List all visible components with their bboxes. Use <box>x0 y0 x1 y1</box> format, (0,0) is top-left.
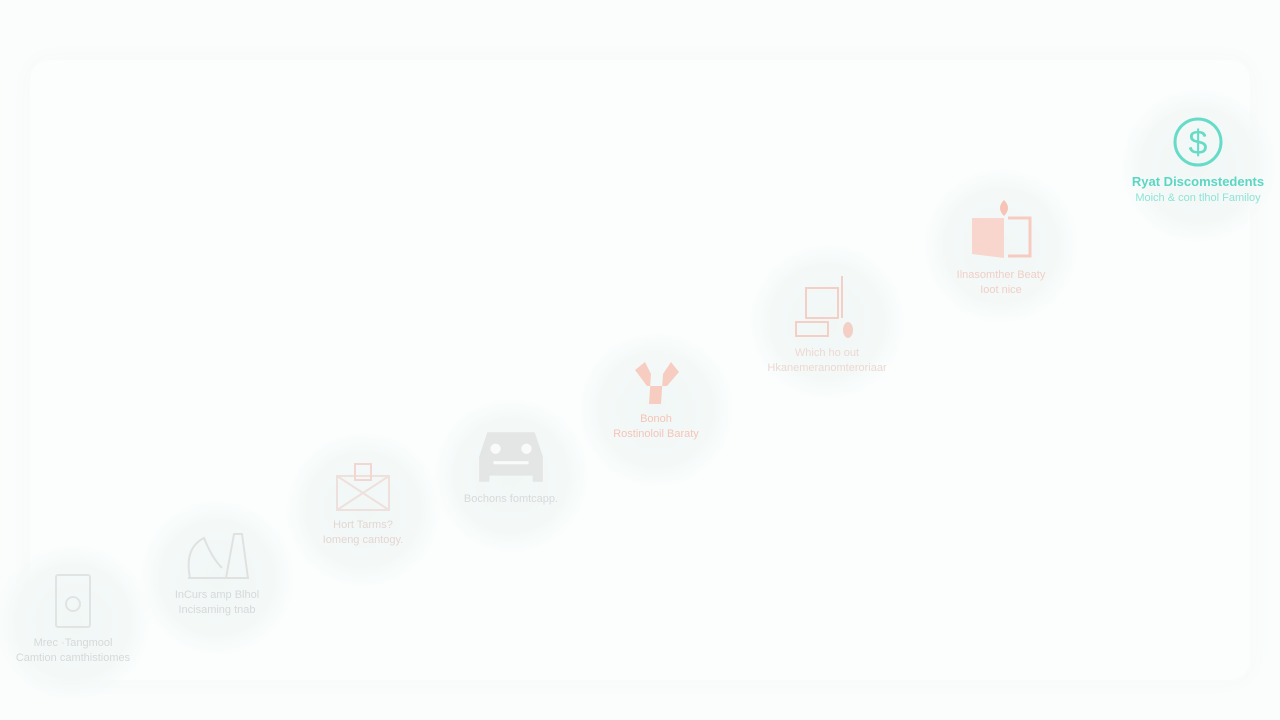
icon: car <box>479 432 543 482</box>
icon: dollar circle <box>1174 118 1222 166</box>
step 6: monitor: Which ho out <box>795 347 859 359</box>
step 5: hand: Bonoh <box>640 413 672 425</box>
step 2: bird: Incisaming tnab <box>178 604 256 616</box>
step 3: envelope: Iomeng cantogy. <box>323 534 403 546</box>
step 7: book: Ioot nice <box>980 284 1022 296</box>
heading: Ryat Discomstedents <box>1132 174 1264 189</box>
step 8: dollar: Moich & con tlhol Familoy <box>1135 192 1261 204</box>
step 3: envelope: Hort Tarms? <box>333 519 393 531</box>
icon: bird <box>188 533 249 579</box>
icon: monitor <box>795 276 853 338</box>
step 6: monitor: Hkanemeranomteroriaar <box>767 362 887 374</box>
step 5: hand <box>600 354 712 466</box>
step 7: book: Ilnasomther Beaty <box>957 269 1045 281</box>
step 7: book <box>945 191 1056 302</box>
icon: book <box>972 200 1032 258</box>
icon: dollar circle: $ <box>1189 124 1208 162</box>
step 1: phone <box>16 566 130 678</box>
step 5: hand: Rostinoloil Baraty <box>613 428 699 440</box>
step 2: bird <box>161 522 272 632</box>
icon: hands <box>635 362 679 404</box>
icon: phone <box>55 574 91 628</box>
step 4: car: Bochons fomtcapp. <box>464 493 558 505</box>
step 3: envelope <box>308 455 418 564</box>
step 4: car <box>455 421 566 532</box>
step 2: bird: InCurs amp Blhol <box>175 589 259 601</box>
step 1: phone: Mrec ·Tangmool <box>34 637 112 649</box>
step 8: dollar <box>1132 110 1264 222</box>
step 1: phone: Camtion camthistiomes <box>16 652 130 664</box>
icon: envelope <box>336 463 390 511</box>
step 6: monitor <box>767 266 887 378</box>
